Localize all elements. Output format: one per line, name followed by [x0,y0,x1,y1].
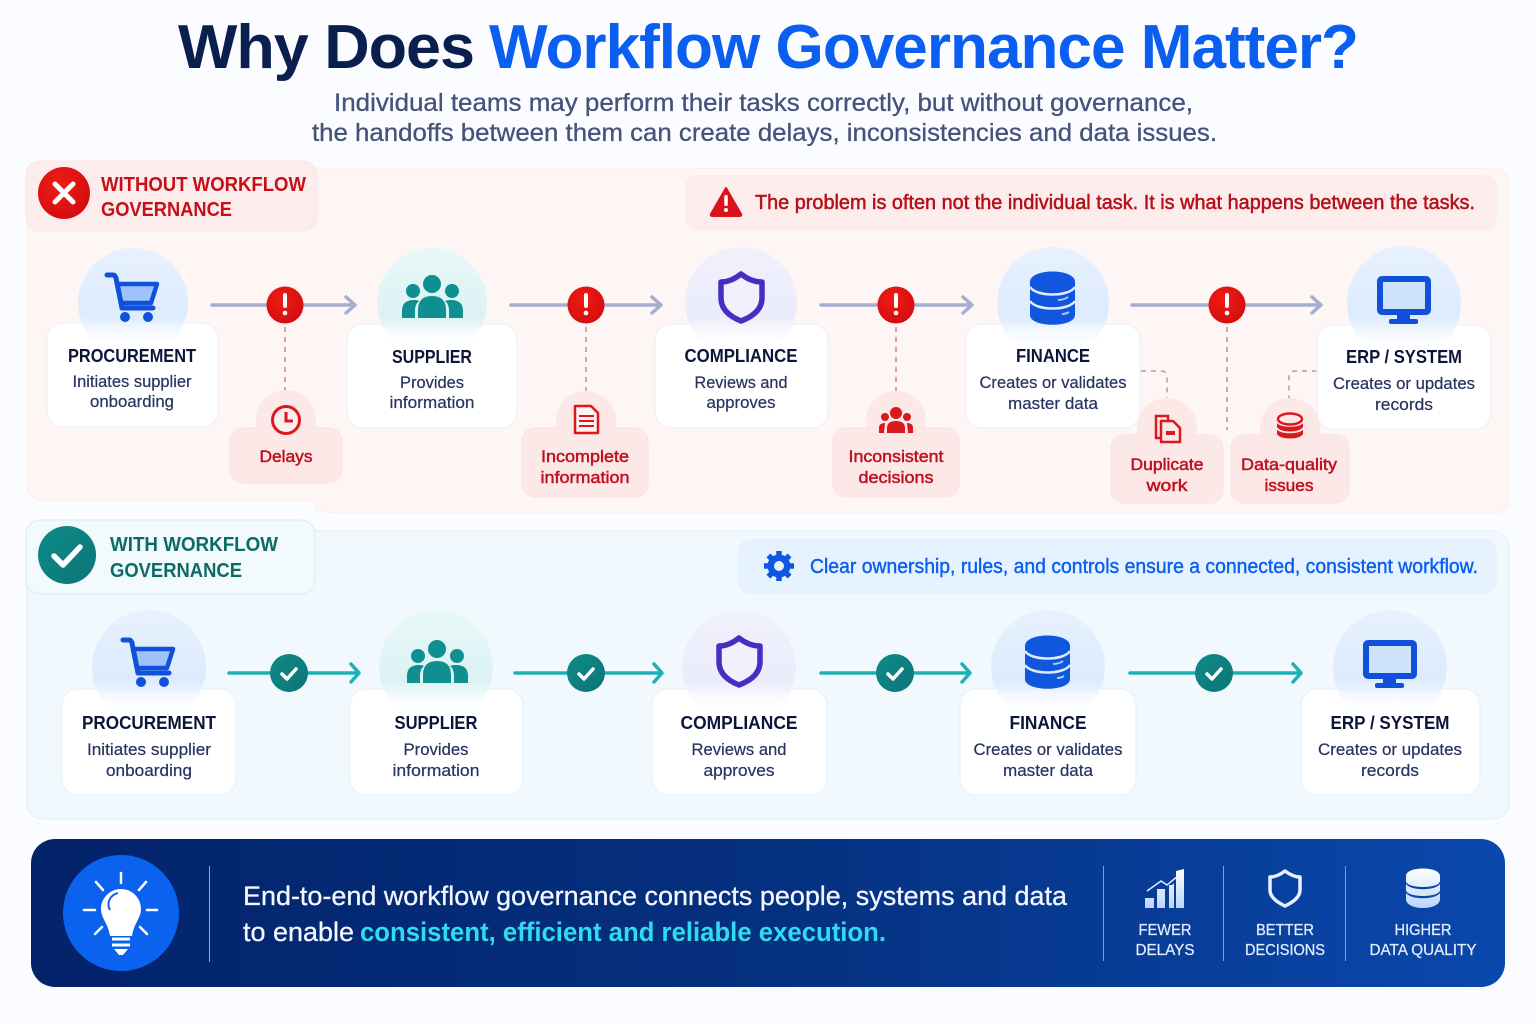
node: procurement: onboarding [106,761,192,780]
issue: inconsistent decisions [833,391,959,497]
badge: without workflow governance [26,161,317,231]
node: supplier: SUPPLIER [392,347,472,367]
benefit: fewer delays: DELAYS [1136,942,1194,959]
arrow: compliance to finance [821,664,970,682]
arrow: supplier to compliance [511,297,661,313]
issue: data-quality issues: issues [1264,476,1314,495]
node: supplier: Provides [404,740,468,759]
node: procurement: Initiates supplier [72,372,192,391]
node: supplier: information [392,761,480,780]
issue: data-quality issues [1231,398,1349,503]
banner message: to enable [243,917,354,947]
benefit: higher data quality [1370,868,1477,959]
node: erp system: records [1361,761,1419,780]
node: compliance: COMPLIANCE [680,713,798,733]
benefit: better decisions: DECISIONS [1245,942,1325,959]
dashed connectors [285,327,1317,430]
badge: without workflow governance: GOVERNANCE [101,199,232,221]
node: erp system [1317,246,1491,429]
benefit: fewer delays [1136,869,1194,959]
node: finance: master data [1003,761,1094,780]
node: erp system: Creates or updates [1333,374,1475,393]
node: procurement [47,248,218,427]
issue: delays [230,390,342,483]
node: compliance [655,247,828,428]
node: finance: Creates or validates [980,373,1126,392]
issue: duplicate work [1111,398,1223,503]
check icon 1 [270,654,308,692]
issue: incomplete information: information [540,468,630,487]
node: supplier [350,610,523,795]
arrow: supplier to compliance [515,664,662,682]
benefit: higher data quality: DATA QUALITY [1370,942,1477,959]
callout: problem statement [685,175,1497,230]
node: supplier: SUPPLIER [394,713,478,733]
issue: delays: Delays [260,447,312,466]
node: compliance: approves [706,393,776,412]
arrow: compliance to finance [821,297,972,313]
node: erp system: ERP / SYSTEM [1330,713,1450,733]
node: erp system: ERP / SYSTEM [1346,347,1462,367]
badge: with workflow governance: GOVERNANCE [110,560,242,582]
node: finance: master data [1008,394,1099,413]
node: procurement: onboarding [90,392,174,411]
node: finance: FINANCE [1016,346,1090,366]
subtitle [312,89,1217,147]
node: procurement: PROCUREMENT [68,346,196,366]
check icon 3 [876,654,914,692]
alert icon 3 [878,286,914,324]
node: supplier: Provides [400,373,464,392]
node: procurement: Initiates supplier [87,740,211,759]
node: supplier: information [390,393,474,412]
banner: conclusion [31,839,1505,987]
node: finance [966,247,1140,428]
benefit: higher data quality: HIGHER [1394,922,1452,939]
issue: duplicate work: Duplicate [1130,455,1204,474]
issue: data-quality issues: Data-quality [1241,455,1338,474]
benefit: fewer delays: FEWER [1138,922,1192,939]
callout: clear ownership: Clear ownership, rules, and controls ensure a connected, consistent workflow. [810,556,1478,578]
check icon 4 [1195,654,1233,692]
arrow: procurement to supplier [229,664,359,682]
arrow: finance to erp [1130,664,1301,682]
alert icon 1 [266,286,304,324]
node: erp system [1301,610,1480,795]
node: erp system: Creates or updates [1318,740,1462,759]
benefit: better decisions: BETTER [1256,922,1314,939]
icon: light bulb [63,855,179,971]
badge: without workflow governance: WITHOUT WORKFLOW [101,174,306,196]
title: Workflow Governance Matter? [489,13,1358,82]
node: compliance: Reviews and [694,373,788,392]
node: compliance: COMPLIANCE [684,346,798,366]
issue: incomplete information: Incomplete [541,447,629,466]
node: finance: FINANCE [1010,713,1086,733]
banner message [243,881,1068,947]
subtitle: the handoffs between them can create delays, inconsistencies and data issues. [312,119,1217,147]
node: finance: Creates or validates [974,740,1122,759]
panel: without workflow governance [26,161,1509,513]
node: procurement [62,610,236,795]
issue: incomplete information [522,391,648,497]
benefit: better decisions [1245,871,1325,959]
badge: with workflow governance [26,520,315,594]
node: supplier [347,248,517,428]
issue: inconsistent decisions: decisions [858,468,934,487]
banner message: consistent, efficient and reliable execution. [360,917,886,947]
issue: inconsistent decisions: Inconsistent [848,447,944,466]
banner message: End-to-end workflow governance connects people, systems and data [243,881,1068,911]
badge: with workflow governance: WITH WORKFLOW [110,534,278,556]
node: erp system: records [1375,395,1433,414]
subtitle: Individual teams may perform their tasks correctly, but without governance, [334,89,1193,117]
issue: duplicate work: work [1145,476,1188,495]
node: procurement: PROCUREMENT [82,713,216,733]
node: compliance [652,610,827,795]
title: Why Does [178,13,474,82]
arrow: finance to erp [1132,297,1321,313]
node: compliance: approves [704,761,774,780]
alert icon 4 [1208,286,1246,324]
panel: with workflow governance [26,520,1509,819]
check icon 2 [567,654,605,692]
node: compliance: Reviews and [692,740,786,759]
callout: clear ownership [738,539,1497,594]
callout: problem statement: The problem is often not the individual task. It is what happens between the tasks. [755,192,1475,214]
node: finance [960,610,1136,795]
arrow: procurement to supplier [212,297,355,313]
alert icon 2 [568,286,604,324]
